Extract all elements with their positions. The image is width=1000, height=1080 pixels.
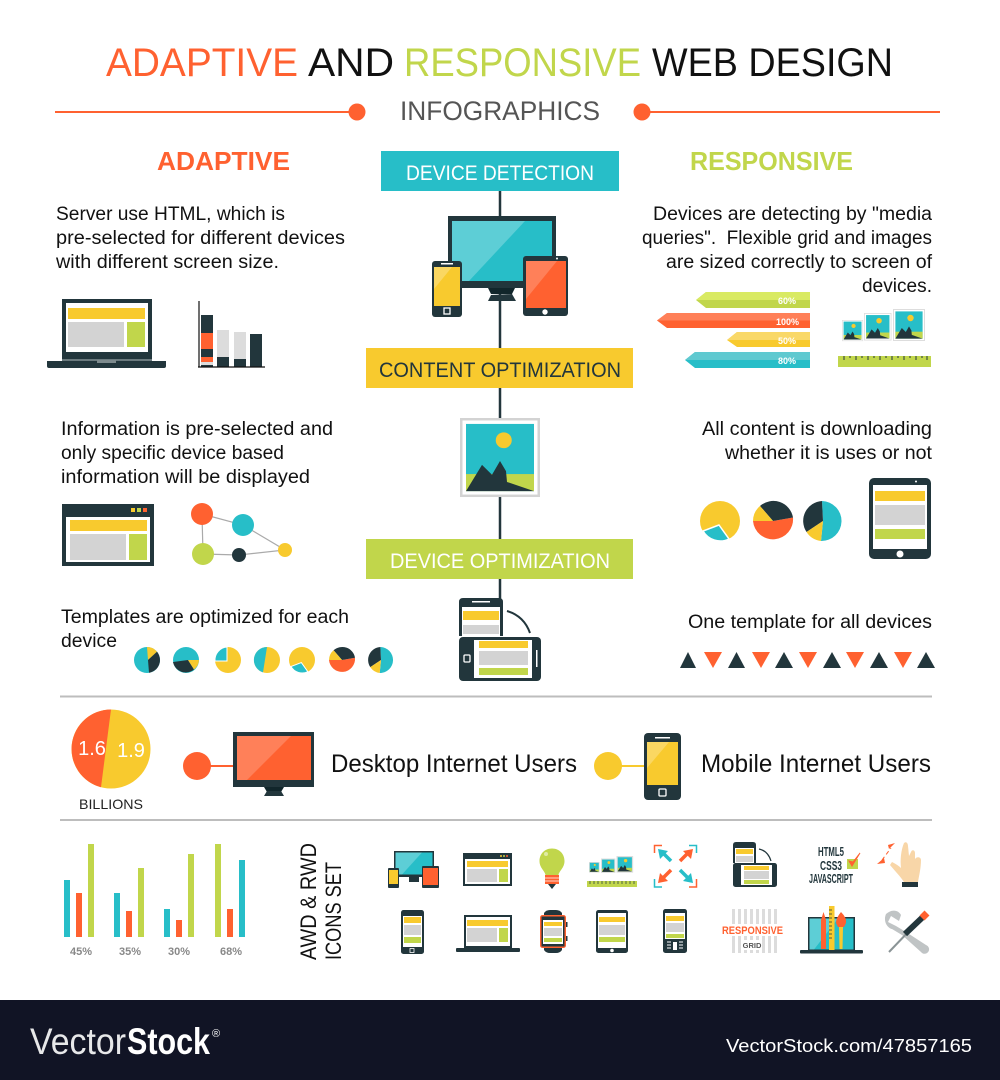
text: adaptive content: Information is pre-selected and <box>61 419 333 440</box>
icon: laptop <box>47 299 166 368</box>
mobile users legend: Mobile Internet Users <box>701 750 931 778</box>
icon: html5 css3 javascript: JAVASCRIPT <box>809 871 853 886</box>
text: adaptive content <box>61 419 333 488</box>
banner: content optimization: CONTENT OPTIMIZATION <box>379 359 621 382</box>
text: adaptive detection: Server use HTML, which is <box>56 204 285 225</box>
icon: tablet <box>869 478 931 559</box>
footer bar <box>0 1000 1000 1080</box>
network diagram <box>191 503 292 565</box>
grouped bar chart: 30% <box>168 946 190 958</box>
text: responsive detection: Devices are detecting by "media <box>653 204 932 225</box>
banner: device optimization <box>366 539 633 579</box>
text: responsive detection: queries". Flexible grid and images <box>642 228 932 249</box>
icon: smart watch <box>540 910 568 953</box>
title: ADAPTIVE <box>106 41 298 85</box>
mobile users legend <box>594 733 931 800</box>
heading: responsive: RESPONSIVE <box>690 146 853 176</box>
icon: mini tablet <box>596 910 628 953</box>
ribbon chart <box>657 292 810 368</box>
icon: scaled pictures on ruler <box>838 309 931 367</box>
vertical heading: icons set: AWD & RWD <box>296 843 321 960</box>
pie charts: responsive content <box>700 501 842 541</box>
grouped bar chart: 35% <box>119 946 141 958</box>
title: WEB DESIGN <box>652 41 893 85</box>
icon: responsive grid <box>721 909 785 953</box>
icon: mini window <box>463 853 512 886</box>
grouped bar chart: 45% <box>70 946 92 958</box>
grouped bar chart <box>64 844 245 958</box>
grouped bar chart: 68% <box>220 946 242 958</box>
icon: expand arrows <box>654 846 696 887</box>
text: adaptive templates: Templates are optimized for each <box>61 607 349 628</box>
icon: mini phone <box>401 910 424 954</box>
icon: responsive grid: GRID <box>743 941 762 950</box>
text: adaptive detection: pre-selected for different devices <box>56 228 345 249</box>
text: responsive content <box>702 419 933 464</box>
text: responsive detection: are sized correctly to screen of <box>666 252 933 273</box>
text: adaptive content: information will be displayed <box>61 467 310 488</box>
icon: devices <box>432 216 568 317</box>
icon: html5 css3 javascript: HTML5 <box>818 844 844 859</box>
subtitle with rule: INFOGRAPHICS <box>400 96 600 126</box>
text: responsive content: whether it is uses or not <box>724 443 933 464</box>
title: RESPONSIVE <box>404 41 641 85</box>
icon: wrench and screwdriver <box>885 911 929 954</box>
ribbon chart: 60% <box>778 296 796 306</box>
ribbon chart: 100% <box>776 317 799 327</box>
pie chart: billions of users: BILLIONS <box>79 796 143 812</box>
banner: device detection <box>381 151 619 191</box>
title: AND <box>308 41 394 85</box>
icon: pinch hand <box>877 842 921 887</box>
icon: html5 css3 javascript <box>809 844 860 886</box>
icon: html5 css3 javascript: CSS3 <box>820 858 842 873</box>
text: responsive detection <box>642 204 933 297</box>
text: adaptive detection <box>55 204 345 273</box>
banner: device detection: DEVICE DETECTION <box>406 162 594 185</box>
footer bar: Stock <box>127 1021 210 1062</box>
icon: light bulb <box>540 848 564 889</box>
pie chart: billions of users: 1.9 <box>117 740 145 762</box>
icon: rotating phone <box>459 598 541 681</box>
ribbon chart: 50% <box>778 336 796 346</box>
stacked bar chart <box>198 301 265 367</box>
text: adaptive detection: with different screen size. <box>55 252 279 273</box>
desktop users legend <box>183 732 577 796</box>
subtitle with rule <box>55 96 940 126</box>
small pie charts: templates <box>134 647 393 673</box>
central connector line <box>499 190 501 600</box>
footer bar: ® <box>212 1028 220 1040</box>
banner: content optimization <box>366 348 633 388</box>
heading: adaptive: ADAPTIVE <box>157 146 290 176</box>
banner: device optimization: DEVICE OPTIMIZATION <box>390 550 610 573</box>
icon: mini laptop <box>456 915 520 952</box>
icon: responsive grid: RESPONSIVE <box>722 925 783 937</box>
text: responsive detection: devices. <box>862 276 932 297</box>
triangle pattern <box>680 652 935 668</box>
icon: keypad phone <box>663 909 687 953</box>
icon: mini rotating phone <box>733 842 777 887</box>
icon: laptop with design tools <box>800 906 863 954</box>
footer bar: Vector <box>30 1021 126 1062</box>
vertical heading: icons set: ICONS SET <box>321 862 346 960</box>
icon: picture <box>460 418 540 497</box>
icon: browser window <box>62 504 154 566</box>
vertical heading: icons set <box>296 843 346 960</box>
title <box>106 41 893 85</box>
text: responsive template: One template for all devices <box>688 612 932 633</box>
footer bar: VectorStock.com/47857165 <box>726 1036 972 1056</box>
pie chart: billions of users: 1.6 <box>78 738 106 760</box>
text: adaptive templates <box>61 607 349 652</box>
icon: mini pictures and ruler <box>587 856 637 887</box>
ribbon chart: 80% <box>778 356 796 366</box>
icon: mini devices <box>388 851 439 888</box>
text: adaptive content: only specific device based <box>61 443 284 464</box>
text: responsive content: All content is downloading <box>702 419 932 440</box>
text: adaptive templates: device <box>61 631 117 652</box>
pie chart: billions of users <box>72 710 150 812</box>
desktop users legend: Desktop Internet Users <box>331 750 577 778</box>
